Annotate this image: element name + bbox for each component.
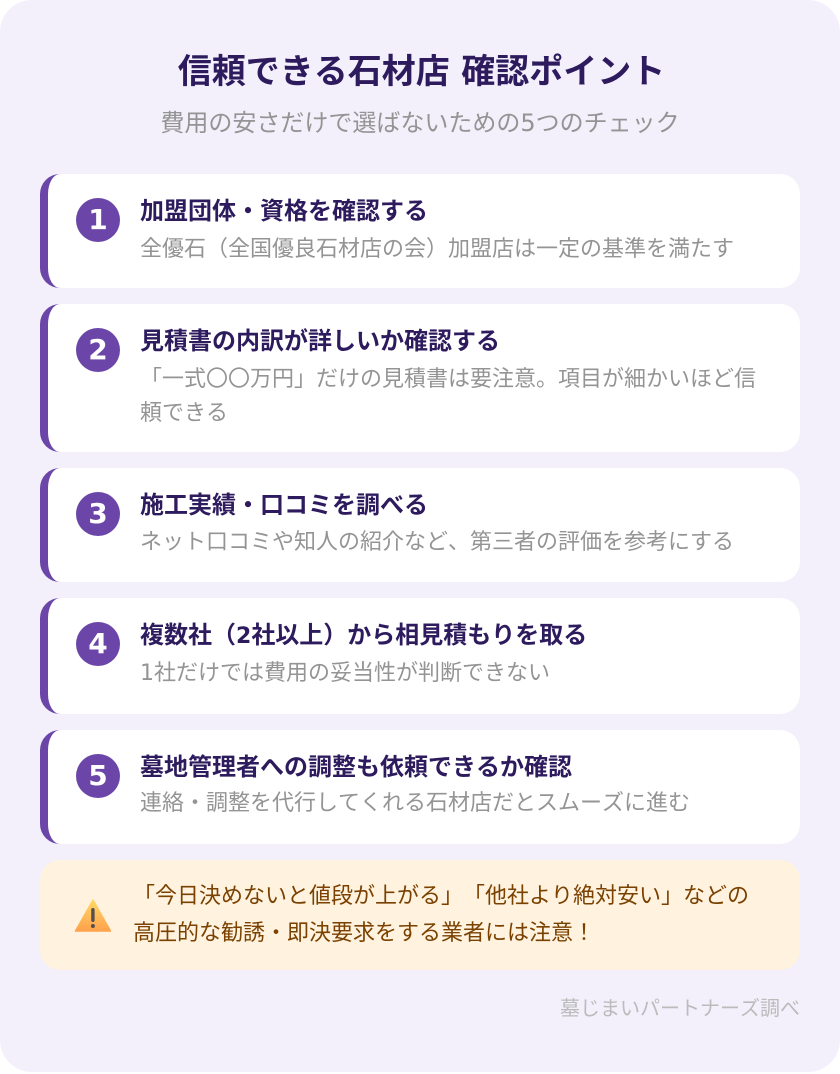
- heading 5: 墓地管理者への調整も依頼できるか確認: [140, 754, 572, 781]
- description 2: 頼できる: [140, 400, 228, 425]
- panel: check 1: [40, 174, 800, 288]
- number badge 2: [76, 328, 120, 372]
- warning text: 高圧的な勧誘・即決要求をする業者には注意！: [133, 920, 595, 945]
- number badge 4: 4: [88, 627, 108, 660]
- icon: warning triangle: [74, 899, 112, 932]
- description 3: ネット口コミや知人の紹介など、第三者の評価を参考にする: [140, 529, 734, 554]
- description 1: 全優石（全国優良石材店の会）加盟店は一定の基準を満たす: [140, 236, 734, 261]
- heading 4: 複数社（2社以上）から相見積もりを取る: [140, 622, 587, 649]
- subtitle: 費用の安さだけで選ばないための5つのチェック: [160, 109, 680, 137]
- number badge 1: [76, 198, 120, 242]
- description 2: 「一式〇〇万円」だけの見積書は要注意。項目が細かいほど信: [140, 366, 756, 391]
- number badge 2: 2: [88, 333, 108, 366]
- panel: check 5: [40, 730, 800, 844]
- warning text: 「今日決めないと値段が上がる」「他社より絶対安い」などの: [133, 883, 749, 908]
- number badge 5: 5: [88, 759, 108, 792]
- number badge 3: [76, 492, 120, 536]
- title: 信頼できる石材店 確認ポイント: [178, 53, 665, 91]
- heading 3: 施工実績・口コミを調べる: [140, 492, 428, 519]
- description 4: 1社だけでは費用の妥当性が判断できない: [140, 660, 550, 686]
- number badge 4: [76, 622, 120, 666]
- warning text: [133, 883, 749, 945]
- description 2: [140, 366, 756, 425]
- number badge 5: [76, 754, 120, 798]
- heading 1: 加盟団体・資格を確認する: [140, 198, 428, 225]
- number badge 1: 1: [88, 203, 108, 236]
- panel: check 3: [40, 468, 800, 582]
- panel: check 4: [40, 598, 800, 714]
- description 5: 連絡・調整を代行してくれる石材店だとスムーズに進む: [140, 790, 690, 815]
- heading 2: 見積書の内訳が詳しいか確認する: [140, 328, 500, 355]
- callout: warning: [40, 860, 800, 970]
- number badge 3: 3: [88, 497, 108, 530]
- panel: check 2: [40, 304, 800, 452]
- source note: 墓じまいパートナーズ調べ: [560, 998, 800, 1020]
